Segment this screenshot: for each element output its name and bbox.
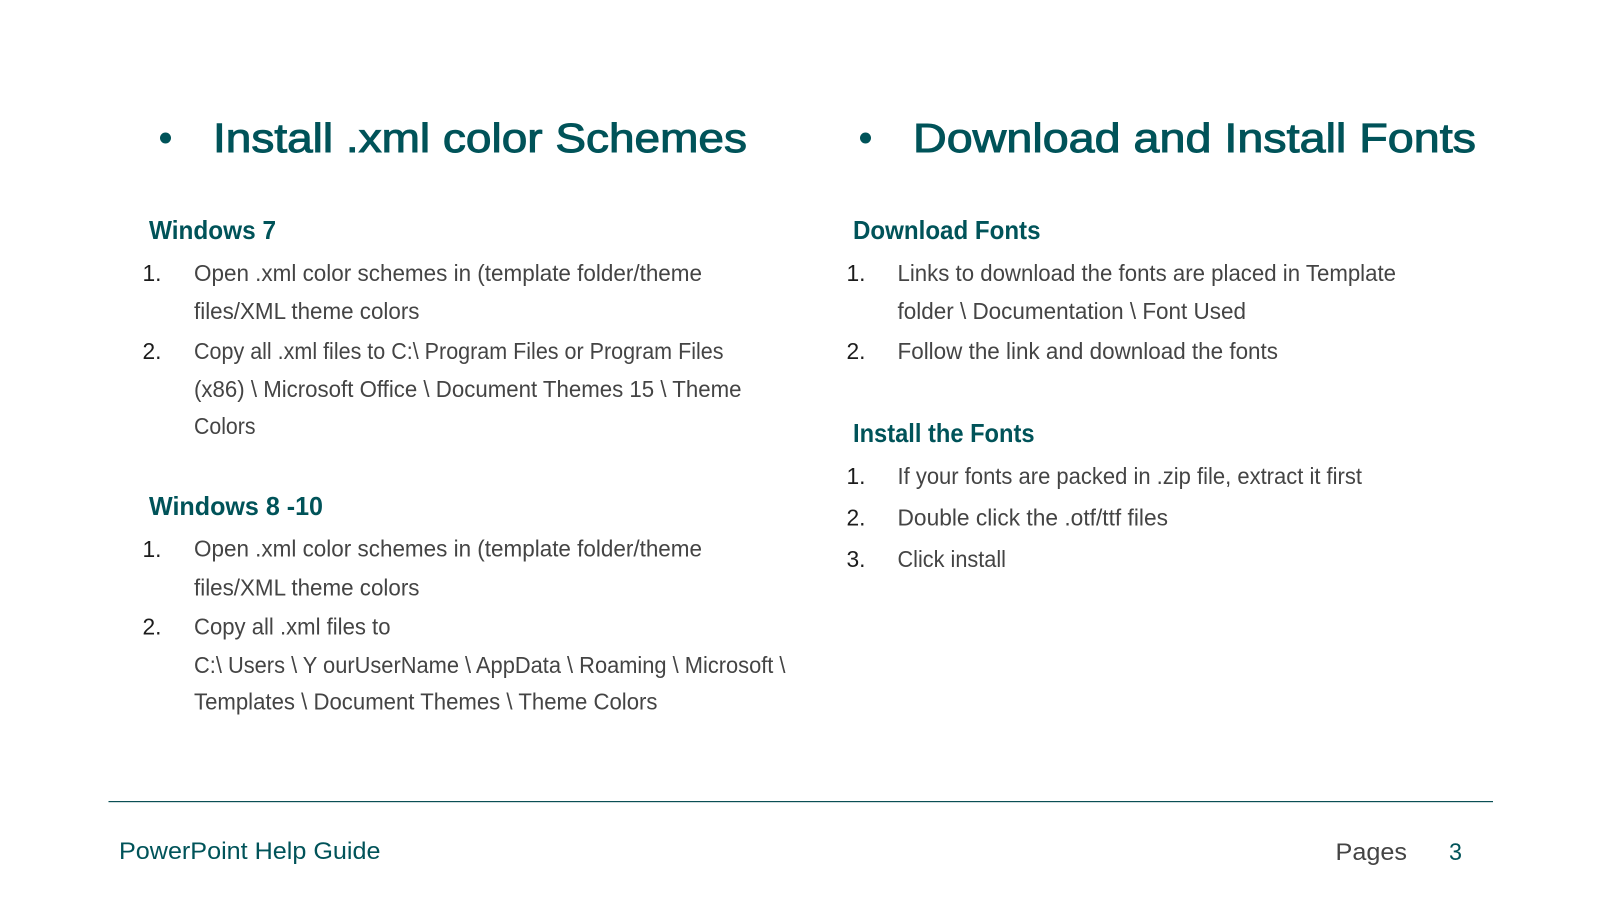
list item 2: 2. (846, 504, 866, 530)
list item 2: C:\ Users \ Y ourUserName \ AppData \ Roaming \ Microsoft \ (194, 652, 786, 678)
list item 1: files/XML theme colors (194, 574, 420, 600)
heading: Install .xml color Schemes: Install .xml color Schemes (213, 115, 747, 161)
list item 1: Open .xml color schemes in (template folder/theme (194, 536, 702, 562)
list item 2: Double click the .otf/ttf files (898, 504, 1168, 530)
list item 1: Links to download the fonts are placed in Template (898, 260, 1396, 286)
list item 1 (846, 260, 1396, 324)
list item 1: Open .xml color schemes in (template folder/theme (194, 260, 702, 286)
list item 3: Click install (898, 546, 1006, 572)
subheading: Windows 7: Windows 7 (149, 215, 276, 245)
list item 2 (142, 338, 742, 439)
subheading: Download Fonts: Download Fonts (853, 215, 1040, 245)
subsection: Install the Fonts (846, 418, 1363, 572)
subsection: Download Fonts (846, 215, 1396, 364)
list item 1: 1. (846, 463, 866, 489)
panel: download and install fonts (846, 115, 1476, 572)
list item 2: 2. (142, 338, 162, 364)
list item 1: 1. (142, 536, 162, 562)
list item 2 (142, 614, 786, 714)
list item 2: Colors (194, 413, 256, 439)
footer title: PowerPoint Help Guide (119, 838, 380, 865)
footer pages label: Pages (1336, 839, 1407, 866)
heading: Download and Install Fonts: Download and Install Fonts (913, 115, 1476, 161)
list item 2: 2. (846, 338, 866, 364)
subsection: Windows 8-10 (142, 491, 786, 714)
list item 1 (142, 260, 702, 324)
panel: install xml color schemes (142, 115, 786, 714)
list item 3 (846, 546, 1006, 572)
list item 1: 1. (142, 260, 162, 286)
subsection: Windows 7 (142, 215, 742, 439)
list item 1: 1. (846, 260, 866, 286)
list item 1: files/XML theme colors (194, 298, 420, 324)
list item 1: If your fonts are packed in .zip file, extract it first (898, 463, 1363, 489)
list item 2: Follow the link and download the fonts (898, 338, 1278, 364)
list item 1 (142, 536, 702, 600)
subheading: Install the Fonts: Install the Fonts (853, 418, 1034, 448)
subheading: Windows 8 -10: Windows 8 -10 (149, 491, 323, 521)
list item 3: 3. (846, 546, 866, 572)
list item 2: Templates \ Document Themes \ Theme Colors (194, 688, 658, 714)
footer page number: 3 (1449, 839, 1462, 866)
list item 2: Copy all .xml files to (194, 614, 390, 640)
list item 2: 2. (142, 614, 162, 640)
list item 2: Copy all .xml files to C:\ Program Files or Program Files (194, 338, 724, 364)
list item 2: (x86) \ Microsoft Office \ Document Themes 15 \ Theme (194, 376, 742, 402)
list item 1: folder \ Documentation \ Font Used (898, 298, 1246, 324)
